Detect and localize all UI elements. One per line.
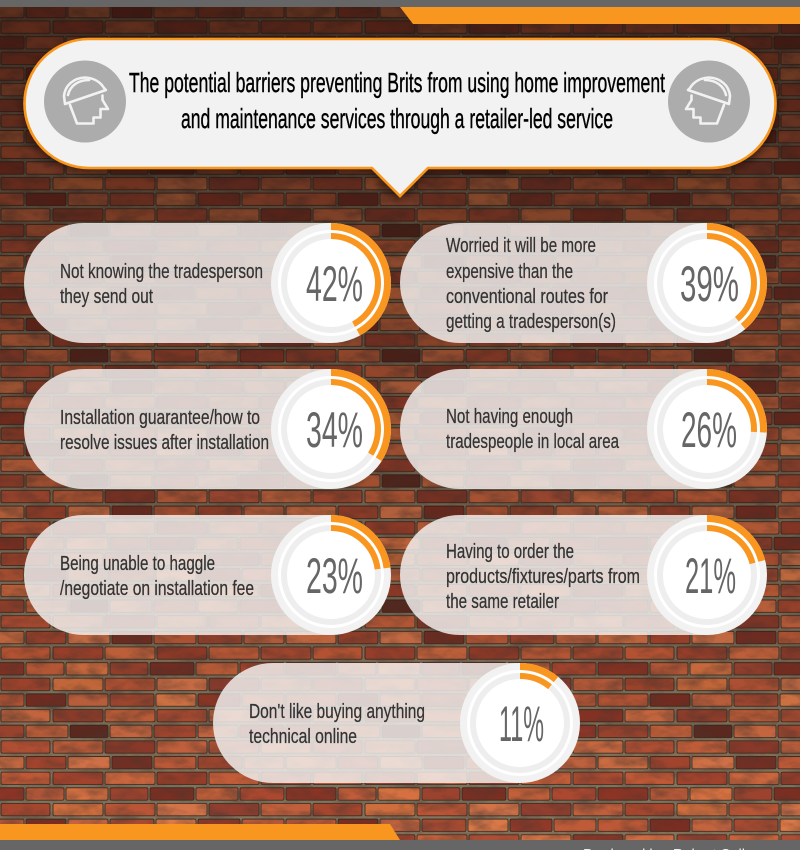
icon: worker head right [668, 60, 750, 142]
panel: 34% installation guarantee: resolve issues after installation [60, 432, 269, 454]
panel: 26% not enough tradespeople: 26% [681, 402, 737, 458]
panel: 23% unable to haggle [24, 515, 391, 635]
panel: 42% not knowing the tradesperson: Not knowing the tradesperson [60, 261, 263, 283]
panel: 26% not enough tradespeople: tradespeople in local area [446, 431, 620, 453]
panel: 39% more expensive: getting a tradesperson(s) [446, 311, 616, 333]
panel: 42% not knowing the tradesperson: 42% [306, 256, 363, 312]
panel: 11% buying technical online [213, 663, 580, 783]
panel: 21% order from same retailer: the same retailer [446, 591, 559, 613]
panel: 11% buying technical online: 11% [499, 696, 544, 752]
title text [129, 67, 665, 134]
panel: 39% more expensive: Worried it will be more [446, 235, 596, 257]
panel: 42% not knowing the tradesperson: they send out [60, 286, 153, 308]
panel: 39% more expensive: conventional routes for [446, 286, 608, 308]
panel: 11% buying technical online: technical online [249, 726, 357, 748]
panel: 11% buying technical online: Don't like buying anything [249, 701, 425, 723]
panel: 26% not enough tradespeople [400, 369, 767, 489]
panel: 23% unable to haggle: Being unable to haggle [60, 553, 215, 575]
bubble shape [24, 39, 775, 196]
panel: 39% more expensive [400, 223, 767, 343]
panel: 21% order from same retailer: products/fixtures/parts from [446, 566, 640, 588]
top bar [0, 0, 800, 24]
panel: 42% not knowing the tradesperson [24, 223, 391, 343]
bottom bar [0, 824, 800, 850]
panel: 21% order from same retailer: 21% [685, 548, 736, 604]
panel: 23% unable to haggle: 23% [306, 548, 363, 604]
title speech bubble [24, 39, 775, 196]
panel: 23% unable to haggle: /negotiate on installation fee [60, 578, 254, 600]
panel: 39% more expensive: expensive than the [446, 261, 573, 283]
panel: 39% more expensive: 39% [680, 256, 739, 312]
icon: worker head left [44, 60, 126, 142]
panel: 21% order from same retailer: Having to order the [446, 541, 574, 563]
panel: 34% installation guarantee [24, 369, 391, 489]
panel: 34% installation guarantee: Installation guarantee/how to [60, 407, 260, 429]
panel: 21% order from same retailer [400, 515, 767, 635]
panel: 34% installation guarantee: 34% [306, 402, 363, 458]
panel: 26% not enough tradespeople: Not having enough [446, 406, 573, 428]
